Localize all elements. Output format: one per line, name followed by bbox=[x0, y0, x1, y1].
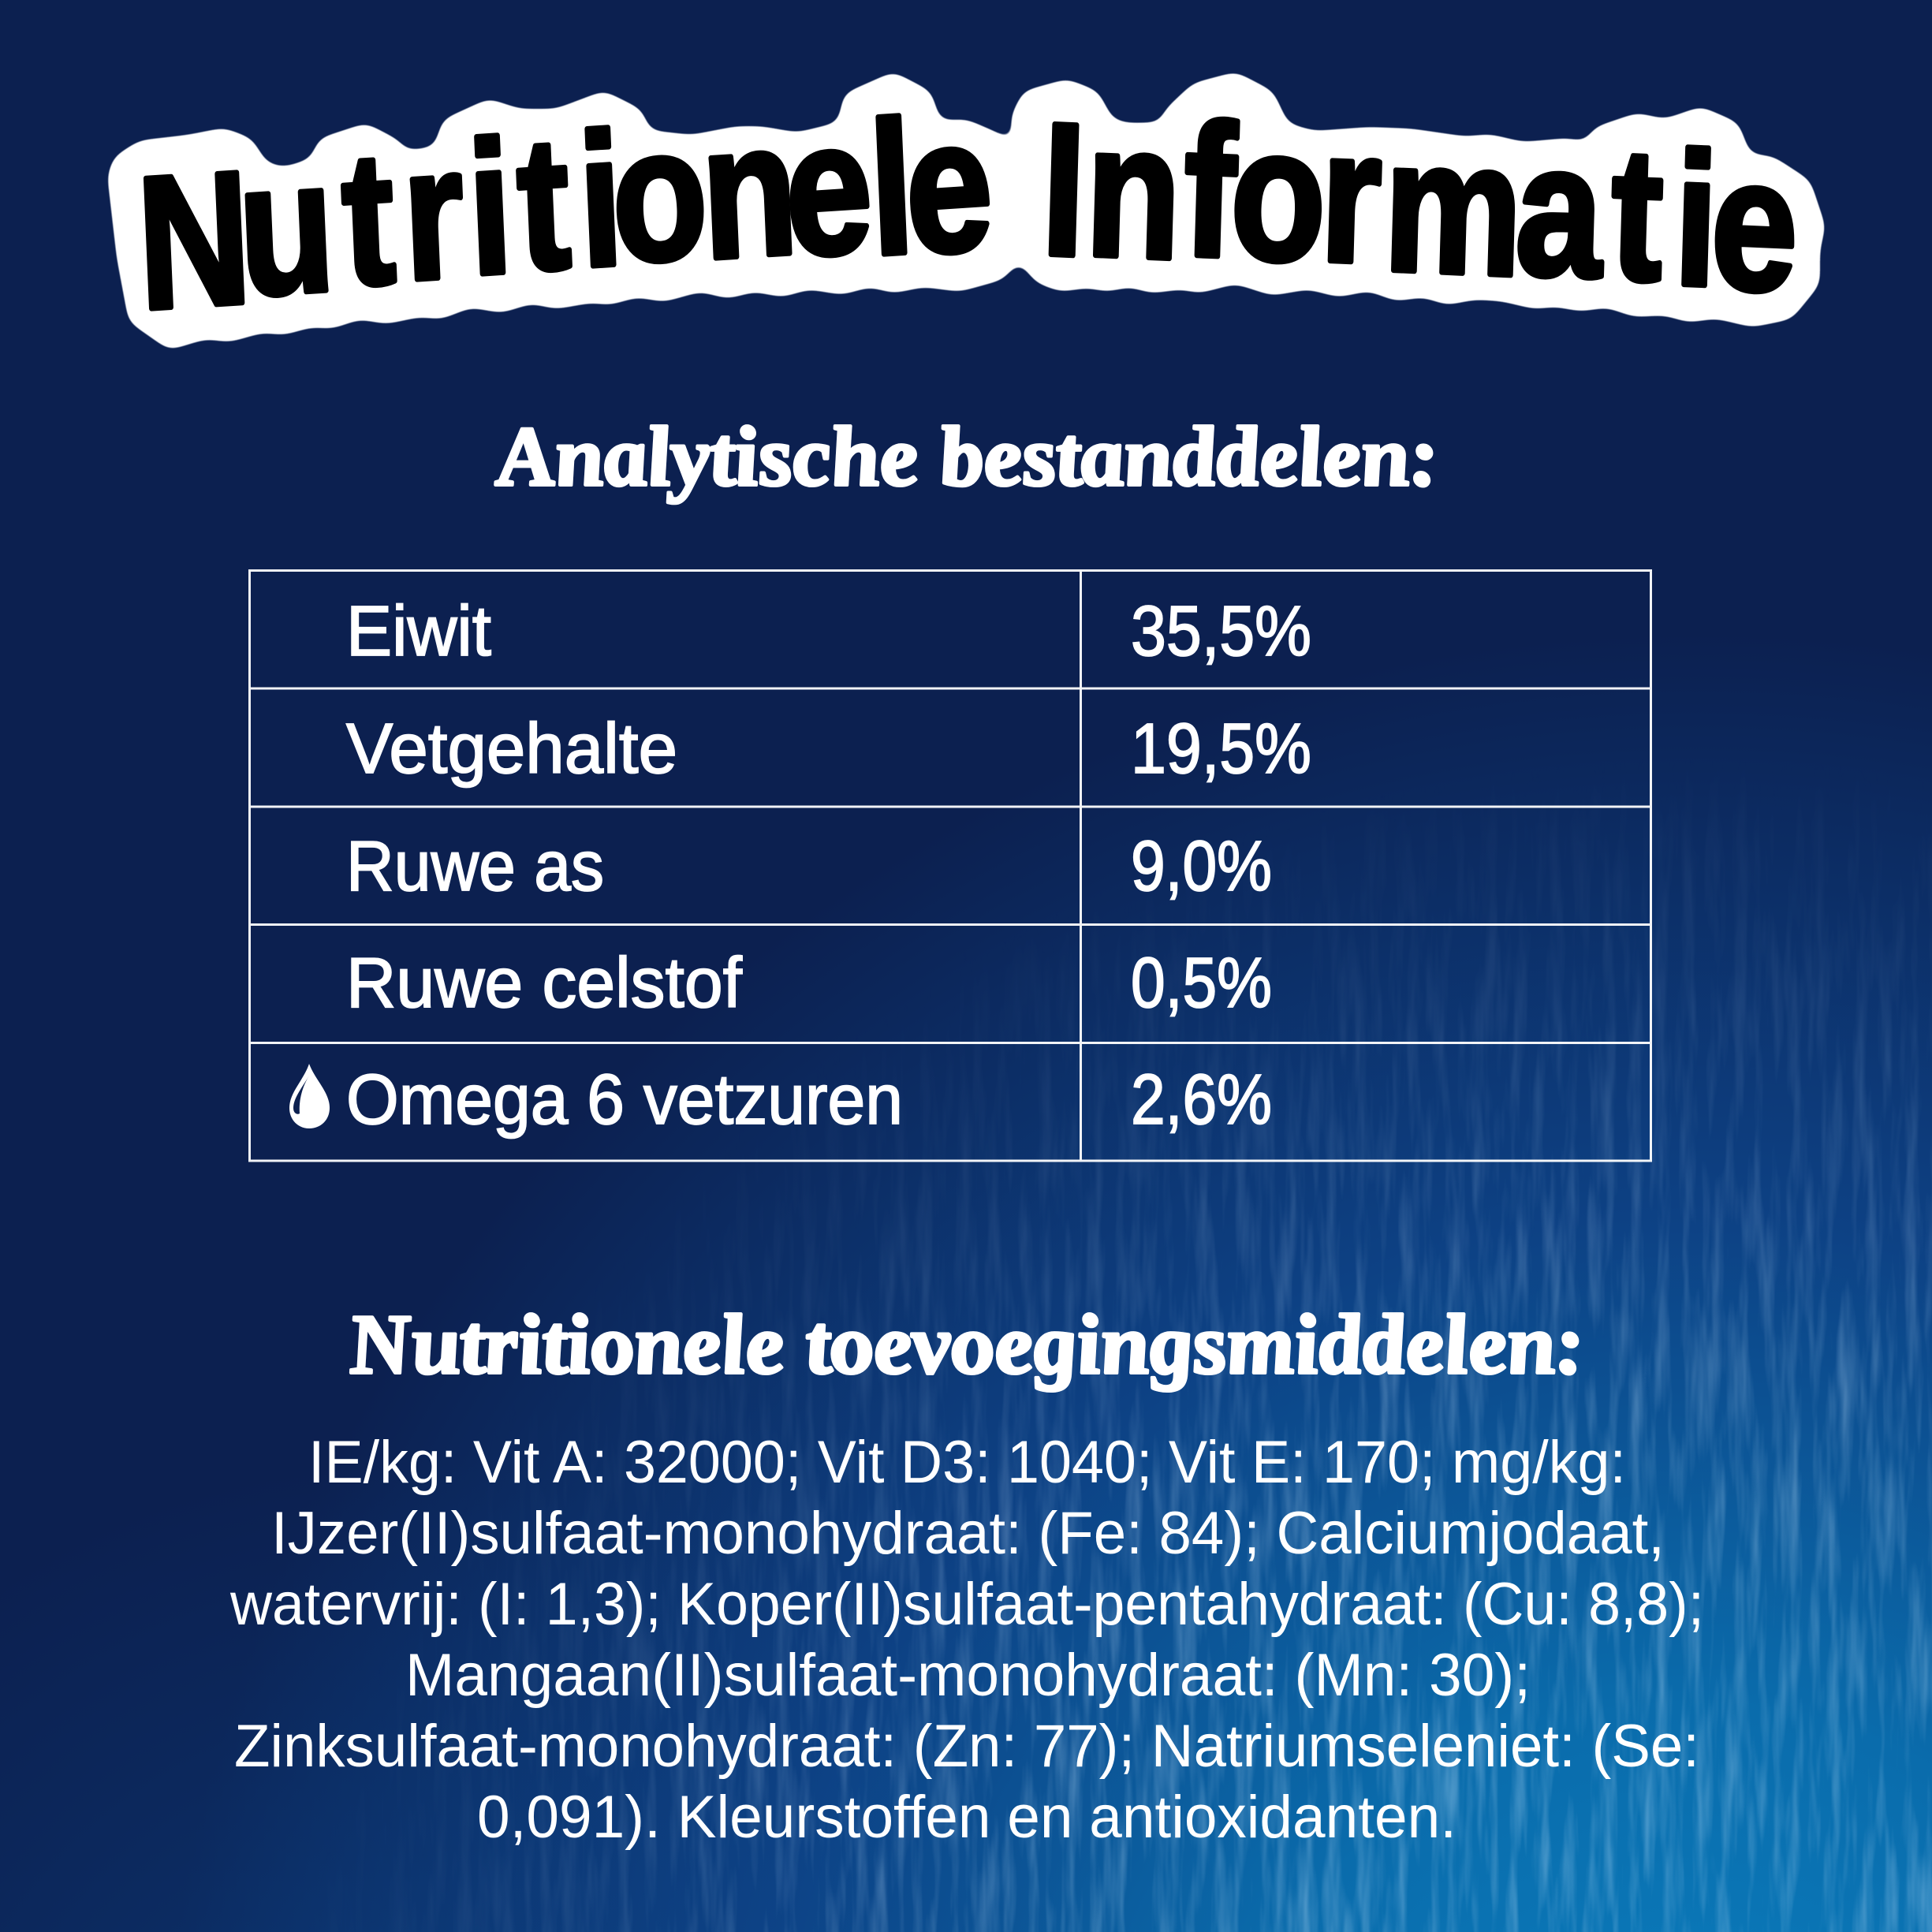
title sticker bbox=[109, 73, 1824, 349]
icon: oil drop bbox=[289, 1064, 330, 1128]
row: Vetgehalte bbox=[346, 710, 1311, 789]
heading: nutritional additives: Nutritionele toevoegingsmiddelen: bbox=[341, 1297, 1590, 1392]
nutrition table bbox=[249, 571, 1651, 1161]
row: Ruwe as bbox=[346, 827, 1272, 906]
additives text block: Zinksulfaat-monohydraat: (Zn: 77); Natriumseleniet: (Se: bbox=[234, 1713, 1699, 1780]
row: Eiwit bbox=[346, 592, 1311, 671]
row: Ruwe celstof bbox=[346, 944, 1272, 1023]
row: Eiwit: 35,5% bbox=[1131, 592, 1311, 671]
row: Ruwe celstof: Ruwe celstof bbox=[346, 944, 743, 1023]
row: Omega 6 vetzuren bbox=[289, 1061, 1272, 1139]
label and value: Omega 6 vetzuren bbox=[346, 1061, 903, 1139]
label and value: 2,6% bbox=[1131, 1061, 1272, 1139]
row: Vetgehalte: Vetgehalte bbox=[346, 710, 677, 789]
additives text block bbox=[229, 1429, 1704, 1851]
additives text block: watervrij: (I: 1,3); Koper(II)sulfaat-pentahydraat: (Cu: 8,8); bbox=[229, 1571, 1704, 1638]
additives text block: IE/kg: Vit A: 32000; Vit D3: 1040; Vit E: 170; mg/kg: bbox=[308, 1429, 1626, 1496]
label and value bbox=[346, 1061, 1272, 1139]
additives text block: 0,091). Kleurstoffen en antioxidanten. bbox=[477, 1784, 1456, 1851]
title word: Informatie: Informatie bbox=[1039, 83, 1801, 332]
row: Vetgehalte: 19,5% bbox=[1131, 710, 1311, 789]
row: Eiwit: Eiwit bbox=[346, 592, 491, 671]
row: Ruwe as: 9,0% bbox=[1131, 827, 1272, 906]
title white outline bbox=[109, 73, 1824, 349]
background bbox=[0, 722, 1932, 1932]
row: Ruwe as: Ruwe as bbox=[346, 827, 604, 906]
table grid bbox=[249, 571, 1651, 1161]
title word: Nutritionele: Nutritionele bbox=[133, 77, 997, 349]
additives text block: Mangaan(II)sulfaat-monohydraat: (Mn: 30); bbox=[405, 1642, 1531, 1709]
heading: analytical constituents: Analytische bestanddelen: bbox=[486, 409, 1444, 504]
row: Ruwe celstof: 0,5% bbox=[1131, 944, 1272, 1023]
additives text block: IJzer(II)sulfaat-monohydraat: (Fe: 84); Calciumjodaat, bbox=[271, 1500, 1665, 1567]
